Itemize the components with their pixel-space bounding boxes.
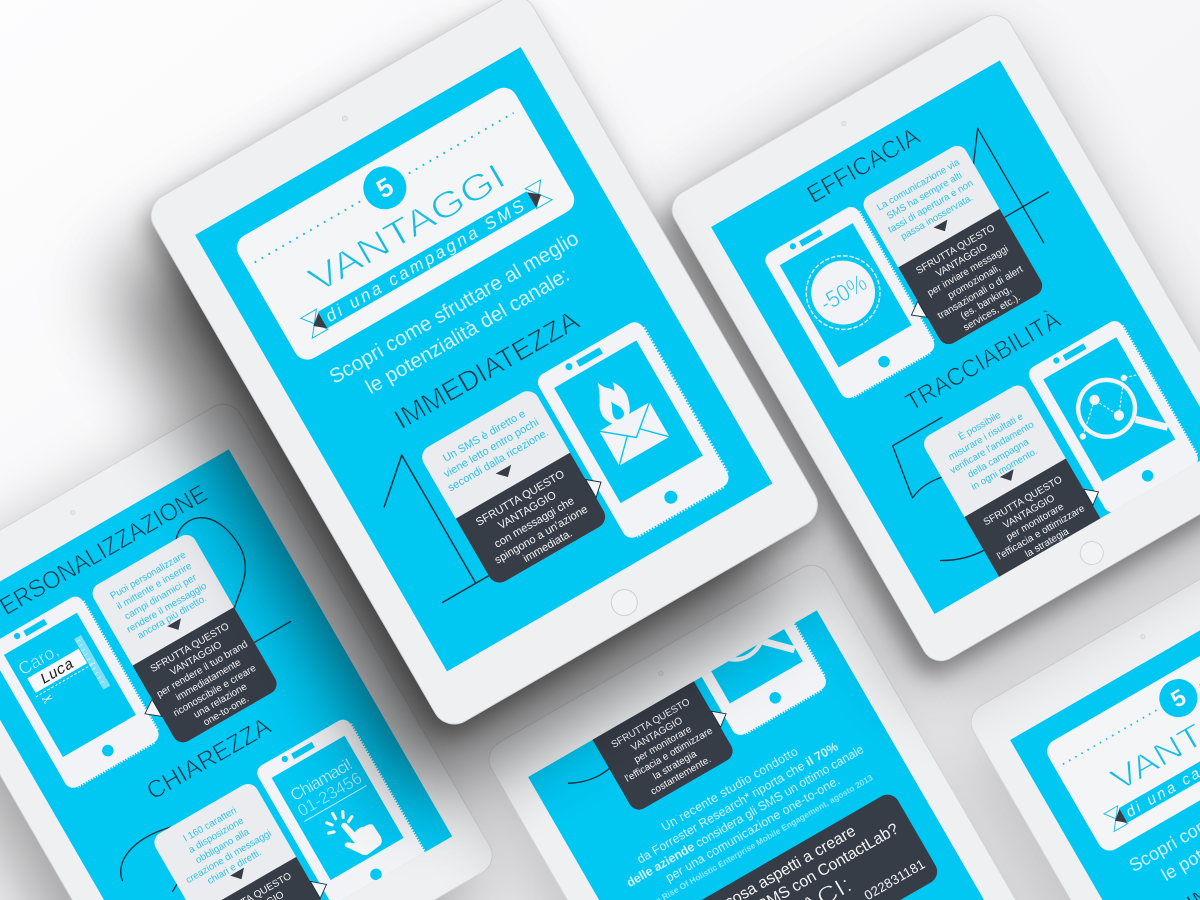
text card: efficacia: promozionali, [946,263,1003,302]
text card: efficacia: SMS ha sempre alti [885,170,964,222]
text card: tracciabilità [924,386,1100,577]
phone: chiamaci: Chiamaci! [287,754,356,805]
icon: tap rays [325,810,354,835]
screen content [528,610,984,900]
text card: tracciabilità: SFRUTTA QUESTO [982,474,1065,528]
study statistic text: per una comunicazione one-to-one. [663,773,842,885]
text card: immediatezza: spingono a un'azione [493,503,590,567]
text card: personalizzazione: ancora più diretto. [136,593,209,642]
bezel [665,8,1200,668]
badge: number 5 [355,158,414,217]
text card: tracciabilità: in ogni momento. [969,446,1040,493]
text card: tracciabilità: VANTAGGIO [1002,493,1057,531]
text card: efficacia: SFRUTTA QUESTO [914,223,997,277]
text card: tracciabilità: la strategia [1023,526,1071,560]
text card: efficacia: (es. banking, [959,284,1014,322]
text card: efficacia: per inviare messaggi [926,244,1010,299]
text card: efficacia: transazionali o di alert [936,264,1025,322]
phone: caro luca: Luca [37,655,77,689]
camera [70,510,76,516]
text card: tracciabilità: misurare i risultati e [947,411,1025,463]
ribbon [301,180,552,338]
text card: efficacia: VANTAGGIO [934,241,990,280]
contact panel [702,794,938,900]
phone: caro luca: ✂ [40,691,57,709]
text card: personalizzazione: riconoscibile e creare [171,663,259,719]
bezel [964,521,1200,900]
text card: immediatezza [418,381,620,587]
tablet: bottom right, title repeated [970,579,1200,900]
text card: tracciabilità: della campagna [966,436,1031,481]
text card bottom: tracciabilità: SFRUTTA QUESTO [610,697,692,751]
icon: flame [587,373,636,427]
text card bottom: tracciabilità: la strategia [651,748,699,782]
text card: personalizzazione: one-to-one. [202,694,251,728]
camera [1140,634,1146,640]
phone: caro luca: Caro, [15,640,62,679]
ribbon: di una campagna SMS [322,196,528,326]
text card: tracciabilità: l'efficacia e ottimizzare [995,503,1087,562]
subtitle: le potenzialità del canale: [362,263,573,399]
home button [1076,537,1108,569]
icon: tapping hand [340,822,382,856]
home button [607,585,642,620]
phone: caro luca [0,593,162,791]
tablet shadow: left [0,432,485,900]
text card: immediatezza: con messaggi che [492,495,576,551]
text card: chiarezza: obbligano alla [194,826,252,866]
text card: efficacia: tassi di apertura e non [886,178,975,236]
title card [1047,656,1200,850]
text card bottom: tracciabilità [592,681,733,810]
heading: efficacia: EFFICACIA [803,123,925,209]
text card: tracciabilità: per monitorare [1005,501,1066,543]
tablet shadow: bottom centre [471,588,1080,900]
bezel [0,397,499,900]
text card: immediatezza: immediata. [521,527,575,565]
text card: chiarezza: creazione di messaggi [184,828,274,886]
text card: tracciabilità: È possibile [957,410,1003,443]
text card: personalizzazione: una relazione [192,681,250,721]
subtitle: Scopri come sfruttare al meglio [325,227,583,389]
text card bottom: tracciabilità: costantemente. [649,754,713,798]
text card: efficacia: La comunicazione via [875,157,962,213]
camera [341,115,348,122]
phone: burning envelope [534,319,732,541]
study statistic text: Un recente studio condotto [659,744,800,834]
text card: personalizzazione: SFRUTTA QUESTO [149,621,231,675]
study statistic text: da Forrester Research* riporta che il 70% [635,739,841,866]
bezel [482,558,1087,900]
text card: personalizzazione: il mittente e inserire [115,561,194,612]
text card: immediatezza: viene letto entro pochi [442,416,541,480]
text card bottom: tracciabilità: per monitorare [632,724,694,766]
title: vantaggi: VANTAGGI [301,155,512,300]
tablet shadow: main [93,0,841,801]
phone: minus fifty percent: -50% [815,269,872,318]
text card: chiarezza: I 160 caratteri [182,805,239,845]
study statistic text: delle aziende considera gli SMS un ottimo canale [624,742,866,890]
badge: number 5: 5 [371,171,399,204]
phone: tracciabilità bottom [702,622,826,736]
heading: chiarezza: CHIAREZZA [142,713,276,806]
text card: personalizzazione: immediatamente [174,657,244,703]
numeral 5 tail [568,768,610,784]
tablet: bottom centre, closing section [488,564,1016,900]
heading: immediatezza: IMMEDIATEZZA [389,304,585,435]
tablet: right, efficacia and tracciabilità [665,8,1200,668]
text card: personalizzazione: VANTAGGIO [169,640,224,678]
screen content [711,60,1200,628]
text card: personalizzazione: per rendere il tuo brand [155,639,250,700]
icon: envelope [599,402,669,466]
text card: chiarezza: a disposizione [187,815,246,856]
text card: chiarezza: chiari e diretti. [205,847,264,887]
text card: personalizzazione [92,535,277,742]
numeral 5 [892,416,984,562]
screen content [195,47,773,671]
numeral 3 [120,826,178,892]
icon: magnifier with data points [1076,374,1168,440]
text card: efficacia: services, etc.). [962,292,1022,334]
text card: immediatezza: Un SMS è diretto e [441,408,528,465]
tablet shadow: bottom right [953,551,1200,900]
phone: chiamaci [254,716,430,900]
text card bottom: tracciabilità: VANTAGGIO [629,715,685,754]
numeral 2 [176,517,292,643]
text card: personalizzazione: campi dinamici per [123,572,199,622]
numeral 1 [366,447,490,604]
bezel [143,0,825,732]
text card: tracciabilità: verificare l'andamento [948,419,1037,476]
numeral 4 [973,128,1049,244]
text card: efficacia: passa inosservata. [899,192,975,243]
tablet: main, title and immediatezza [143,0,825,732]
text card: personalizzazione: rendere il messaggio [125,580,209,635]
phone: minus fifty percent [762,204,938,401]
title card [232,83,579,365]
heading: tracciabilità: TRACCIABILITÀ [901,306,1066,417]
camera [841,121,847,127]
text card: efficacia [864,146,1042,344]
phone: chiamaci: 01-23456 [294,768,365,820]
screen content [1010,630,1200,900]
text card: immediatezza: secondi dalla ricezione. [446,427,551,494]
screen content [0,449,468,900]
phone: magnifier chart [1026,318,1200,515]
text card bottom: tracciabilità: l'efficacia e ottimizzare [623,725,715,785]
text card: immediatezza: SFRUTTA QUESTO [474,468,567,529]
text card: immediatezza: VANTAGGIO [496,489,559,532]
text card: chiarezza [154,784,328,900]
tablet shadow: right [646,20,1200,698]
text card: personalizzazione: Puoi personalizzare [108,550,188,602]
title card: 5 [1166,684,1191,713]
tablet: left, personalizzazione and chiarezza [0,397,499,900]
camera [658,671,664,677]
